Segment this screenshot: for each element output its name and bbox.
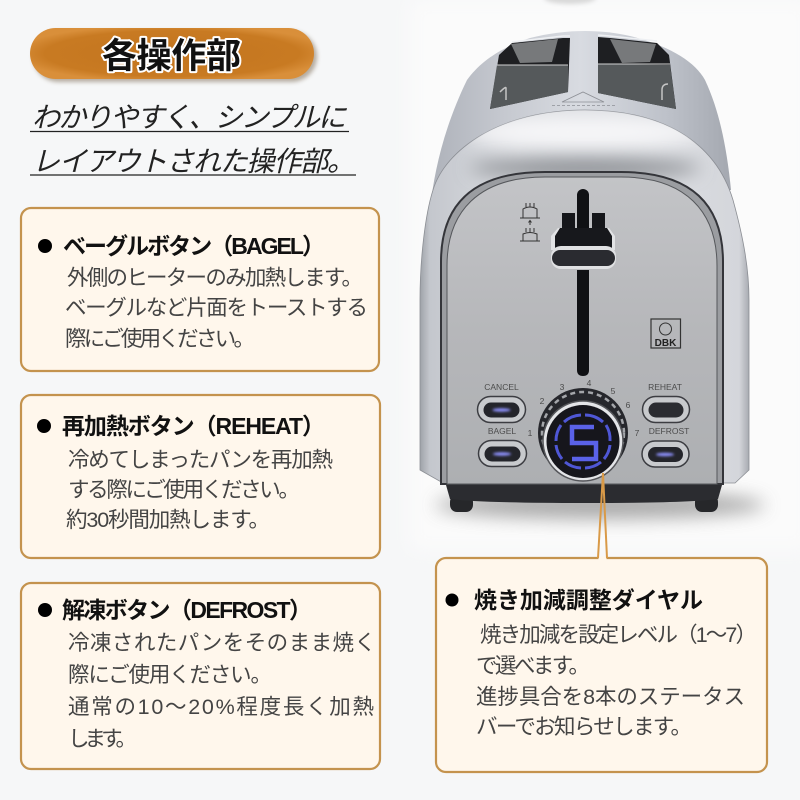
dial numbers: 4	[587, 378, 592, 388]
bagel description: 際にご使用ください。	[65, 327, 255, 351]
defrost description: します。	[68, 727, 137, 751]
upper shell	[430, 31, 731, 210]
dial numbers: 6	[626, 400, 631, 410]
bagel button	[478, 440, 526, 466]
subtitle: レイアウトされた操作部。	[32, 146, 355, 177]
dial numbers	[528, 378, 640, 438]
status bars	[556, 415, 610, 468]
dial description: で選べます。	[476, 654, 590, 678]
dial heading: 焼き加減調整ダイヤル	[474, 587, 703, 613]
cake icon up	[520, 203, 540, 218]
panel: defrost button	[21, 583, 380, 769]
front panel	[447, 177, 717, 484]
toaster	[420, 31, 749, 512]
cake icon down	[520, 228, 540, 241]
left bread slot	[490, 36, 570, 109]
subtitle: わかりやすく、シンプルに	[32, 102, 348, 133]
lever	[551, 213, 616, 269]
title text: 各操作部	[102, 37, 241, 76]
dial	[538, 388, 628, 481]
dial description: 進捗具合を8本のステータス	[476, 685, 745, 709]
dial numbers: 2	[540, 396, 545, 406]
subtitle	[30, 102, 356, 177]
right bread slot	[598, 35, 676, 109]
dial description: バーでお知らせします。	[476, 715, 692, 739]
dial numbers: 3	[560, 382, 565, 392]
dial numbers: 5	[611, 386, 616, 396]
defrost description: 際にご使用ください。	[68, 663, 272, 687]
dial description	[476, 623, 757, 739]
toaster base	[444, 478, 724, 503]
panel: bagel button	[21, 208, 379, 371]
toaster feet	[450, 495, 718, 512]
bagel description: ベーグルなど片面をトーストする	[65, 296, 368, 320]
front shell	[420, 110, 749, 483]
photo background glow	[410, 0, 800, 550]
front panel rim	[441, 172, 723, 484]
bagel description: 外側のヒーターのみ加熱します。	[67, 266, 363, 290]
top marking	[552, 92, 616, 106]
defrost button	[642, 441, 689, 467]
lever slot lower	[577, 270, 589, 376]
defrost heading: 解凍ボタン（DEFROST）	[62, 597, 312, 623]
dial numbers: 7	[635, 428, 640, 438]
reheat description: する際にご使用ください。	[68, 478, 300, 502]
defrost description	[68, 631, 376, 751]
reheat description	[66, 448, 333, 532]
reheat heading: 再加熱ボタン（REHEAT）	[62, 413, 325, 439]
button labels	[484, 382, 689, 436]
reheat description: 冷めてしまったパンを再加熱	[68, 448, 333, 472]
digit 5	[572, 427, 596, 459]
dial description: 焼き加減を設定レベル（1～7）	[480, 623, 757, 647]
panel: browning dial	[436, 473, 767, 772]
button labels: BAGEL	[488, 426, 516, 436]
toaster floor shadow	[435, 491, 765, 519]
top edge smudge	[544, 0, 596, 4]
lever slot upper	[577, 189, 589, 249]
defrost description: 冷凍されたパンをそのまま焼く	[68, 631, 376, 655]
title pill	[30, 28, 317, 82]
button labels: DEFROST	[649, 426, 689, 436]
reheat button	[642, 396, 690, 422]
reheat description: 約30秒間加熱します。	[66, 508, 270, 532]
callout connector	[598, 473, 607, 560]
bagel description	[65, 266, 368, 351]
button labels: REHEAT	[648, 382, 682, 392]
bagel heading: ベーグルボタン（BAGEL）	[63, 233, 325, 259]
cancel button	[478, 396, 526, 422]
defrost description: 通常の10～20%程度長く加熱	[68, 695, 374, 719]
panel: reheat button	[21, 395, 380, 558]
dial numbers: 1	[528, 428, 533, 438]
DBK logo	[651, 319, 680, 349]
DBK logo: DBK	[655, 338, 677, 349]
small arrow	[528, 220, 532, 225]
button labels: CANCEL	[484, 382, 519, 392]
